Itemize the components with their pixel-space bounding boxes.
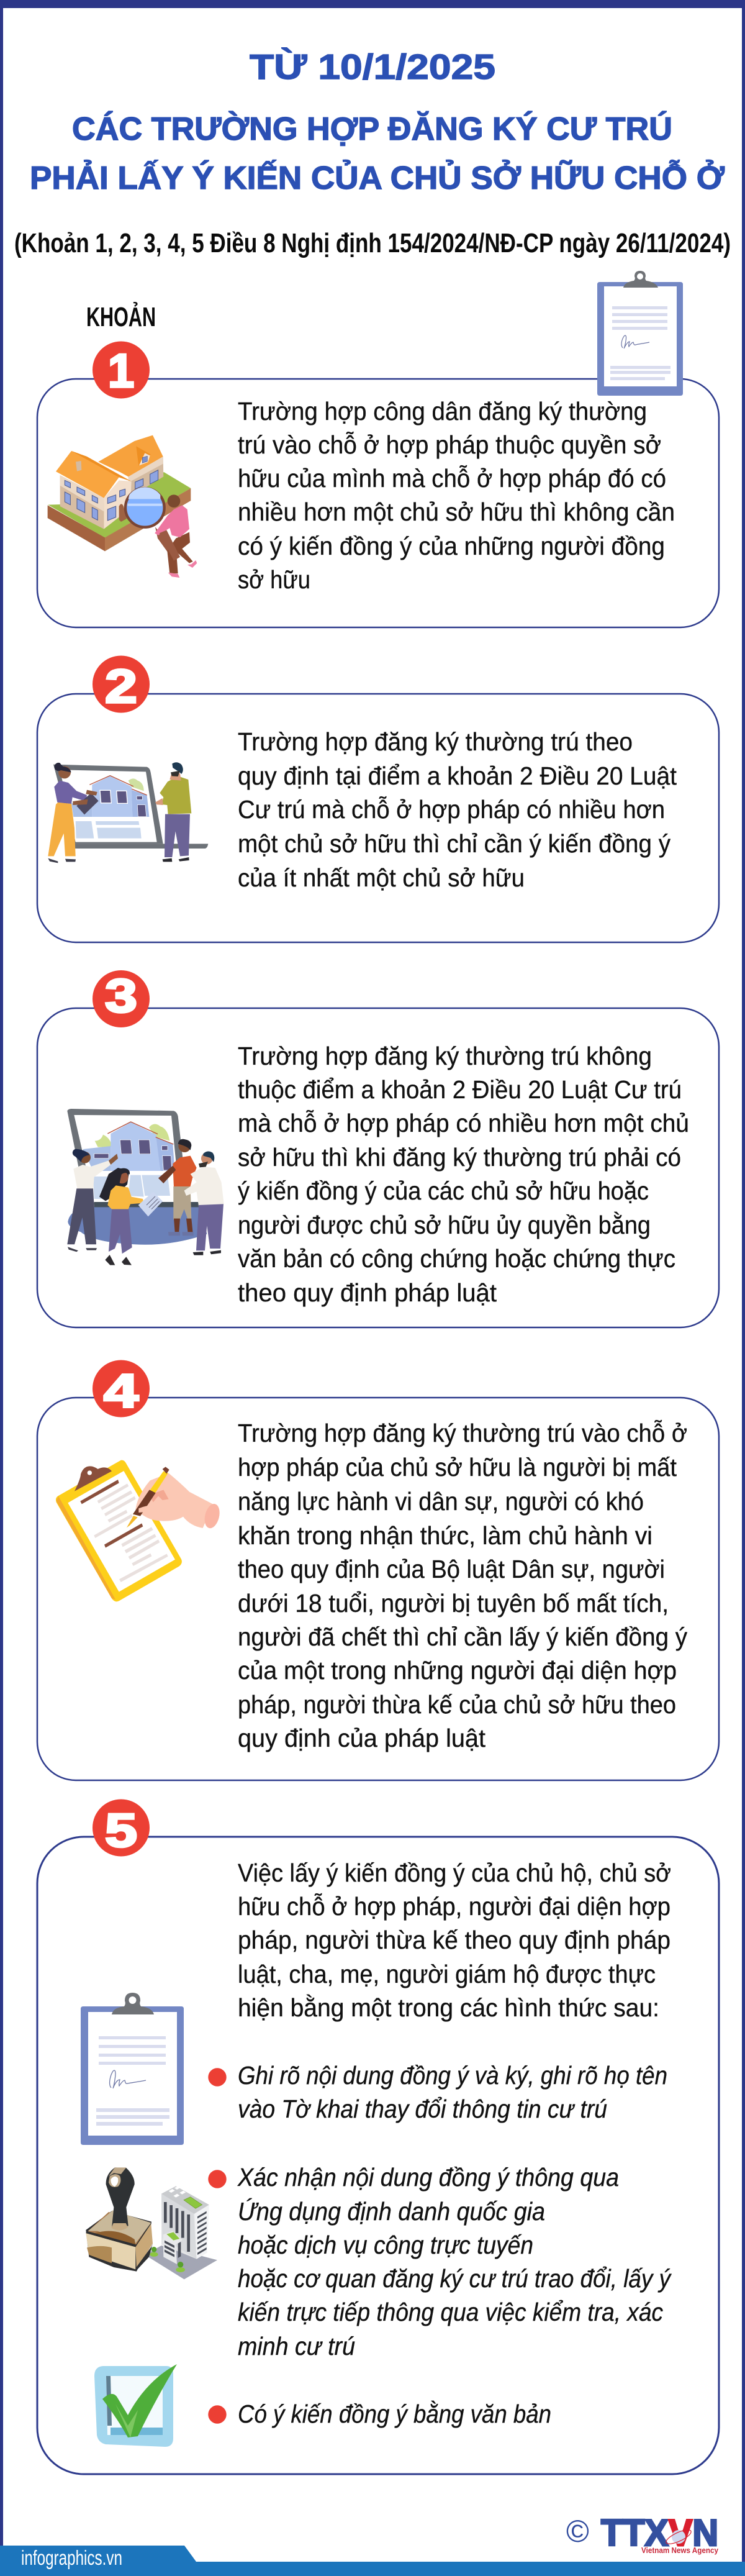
title: TỪ 10/1/2025 [250, 47, 495, 87]
text: khoản 4: dưới 18 tuổi, người bị tuyên bố mất tích, [238, 1589, 669, 1618]
bullet 2: Ứng dụng định danh quốc gia [238, 2197, 545, 2226]
bullet 1: vào Tờ khai thay đổi thông tin cư trú [238, 2095, 607, 2123]
text: khoản 3: người được chủ sở hữu ủy quyền bằng [238, 1211, 651, 1239]
number badge 4: 4 [104, 1365, 138, 1418]
text: khoản 2: một chủ sở hữu thì chỉ cần ý kiến đồng ý [238, 829, 670, 858]
card outline [37, 1008, 719, 1327]
logo: TTXVN Vietnam News Agency: © [566, 2514, 589, 2549]
text: intro: hữu chỗ ở hợp pháp, người đại diện hợp [238, 1892, 670, 1921]
number badge 5: 5 [105, 1805, 137, 1857]
number badge 3: 3 [105, 970, 137, 1022]
card outline [37, 1837, 719, 2474]
logo: TTXVN Vietnam News Agency: Vietnam News Agency [641, 2546, 719, 2555]
text: khoản 4: năng lực hành vi dân sự, người có khó [238, 1487, 644, 1516]
panel: khoản 2 [37, 656, 719, 942]
text: khoản 3: Trường hợp đăng ký thường trú không [238, 1042, 652, 1070]
text: intro: Việc lấy ý kiến đồng ý của chủ hộ, chủ sở [238, 1859, 671, 1887]
text: intro: hiện bằng một trong các hình thức sau: [238, 1993, 659, 2022]
text: khoản 4: người đã chết thì chỉ cần lấy ý kiến đồng ý [238, 1623, 687, 1651]
text: khoản 2: của ít nhất một chủ sở hữu [238, 863, 525, 892]
icon: group of four people with laptop [67, 1109, 224, 1265]
card outline [37, 1398, 719, 1780]
icon: stamp and office building [86, 2167, 217, 2279]
bullet 2 [208, 2163, 672, 2360]
number badge 1: 1 [108, 345, 134, 398]
card outline [37, 694, 719, 942]
text: intro: pháp, người thừa kế theo quy định pháp [238, 1926, 670, 1954]
icon: two people with laptop showing a house [48, 762, 208, 863]
text: khoản 4: Trường hợp đăng ký thường trú vào chỗ ở [238, 1419, 687, 1447]
card outline [37, 379, 719, 627]
icon: clipboard with signature [81, 1993, 184, 2145]
text: khoản 4: của một trong những người đại diện hợp [238, 1656, 677, 1685]
text: khoản 2 [238, 727, 677, 892]
text: khoản 4: theo quy định của Bộ luật Dân sự, người [238, 1555, 665, 1583]
text: intro: luật, cha, mẹ, người giám hộ được thực [238, 1960, 656, 1988]
text: khoản 3 [238, 1042, 689, 1307]
icon: house under magnifying glass [48, 435, 197, 578]
footer band [0, 2546, 745, 2576]
number badge 2: 2 [105, 660, 137, 713]
icon: green check in blue box [94, 2364, 177, 2447]
text: intro [238, 1859, 671, 2022]
title: PHẢI LẤY Ý KIẾN CỦA CHỦ SỞ HỮU CHỖ Ở [30, 160, 725, 196]
text: khoản 3: ý kiến đồng ý của các chủ sở hữu hoặc [238, 1176, 649, 1205]
text: khoản 4 [238, 1419, 687, 1752]
bullet 1 [208, 2061, 667, 2123]
text: khoản 1: hữu của mình mà chỗ ở hợp pháp đó có [238, 464, 666, 493]
text: khoản 3: thuộc điểm a khoản 2 Điều 20 Luật Cư trú [238, 1075, 682, 1104]
icon: hand signing clipboard [56, 1460, 222, 1601]
logo: TTXVN Vietnam News Agency: TTXVN [601, 2512, 718, 2554]
number badge 1 [93, 342, 150, 399]
text: khoản 4: quy định của pháp luật [238, 1724, 486, 1752]
title: CÁC TRƯỜNG HỢP ĐĂNG KÝ CƯ TRÚ [72, 111, 672, 147]
title [30, 47, 725, 196]
text: khoản 3: mà chỗ ở hợp pháp có nhiều hơn một chủ [238, 1109, 689, 1137]
icon: clipboard with signature [597, 271, 683, 396]
number badge 3 [93, 970, 150, 1027]
label: khoản: KHOẢN [86, 301, 156, 332]
bullet 1: Ghi rõ nội dung đồng ý và ký, ghi rõ họ tên [238, 2061, 667, 2090]
footer band: infographics.vn [21, 2546, 122, 2569]
text: khoản 2: Cư trú mà chỗ ở hợp pháp có nhiều hơn [238, 795, 665, 824]
text: khoản 1: sở hữu [238, 565, 310, 594]
bullet 2: minh cư trú [238, 2332, 355, 2360]
text: khoản 1: nhiều hơn một chủ sở hữu thì không cần [238, 498, 675, 526]
bullet 2: hoặc dịch vụ công trực tuyến [238, 2231, 533, 2259]
text: khoản 1: Trường hợp công dân đăng ký thường [238, 397, 647, 426]
bullet 2: hoặc cơ quan đăng ký cư trú trao đổi, lấy ý [238, 2264, 672, 2293]
text: khoản 4: pháp, người thừa kế của chủ sở hữu theo [238, 1690, 676, 1719]
text: khoản 4: khăn trong nhận thức, làm chủ hành vi [238, 1521, 652, 1550]
text: khoản 3: theo quy định pháp luật [238, 1278, 497, 1307]
bullet 2: kiến trực tiếp thông qua việc kiểm tra, xác [238, 2298, 663, 2326]
text: khoản 2: Trường hợp đăng ký thường trú theo [238, 727, 633, 756]
text: khoản 1 [238, 397, 675, 594]
text: khoản 1: có ý kiến đồng ý của những người đồng [238, 532, 665, 560]
number badge 2 [93, 656, 150, 713]
panel: khoản 4 [37, 1360, 719, 1780]
text: khoản 3: văn bản có công chứng hoặc chứng thực [238, 1244, 675, 1273]
text: khoản 2: quy định tại điểm a khoản 2 Điều 20 Luật [238, 762, 677, 790]
panel: khoản 5 [37, 1799, 719, 2474]
bullet 2: Xác nhận nội dung đồng ý thông qua [237, 2163, 619, 2191]
text: khoản 1: trú vào chỗ ở hợp pháp thuộc quyền sở [238, 430, 661, 459]
text: khoản 4: hợp pháp của chủ sở hữu là người bị mất [238, 1453, 677, 1481]
number badge 5 [93, 1799, 150, 1857]
panel: khoản 3 [37, 970, 719, 1327]
number badge 4 [93, 1360, 150, 1418]
bullet 3: Có ý kiến đồng ý bằng văn bản [238, 2400, 551, 2428]
text: khoản 3: sở hữu thì khi đăng ký thường trú phải có [238, 1143, 681, 1172]
panel: khoản 1 [37, 271, 719, 627]
